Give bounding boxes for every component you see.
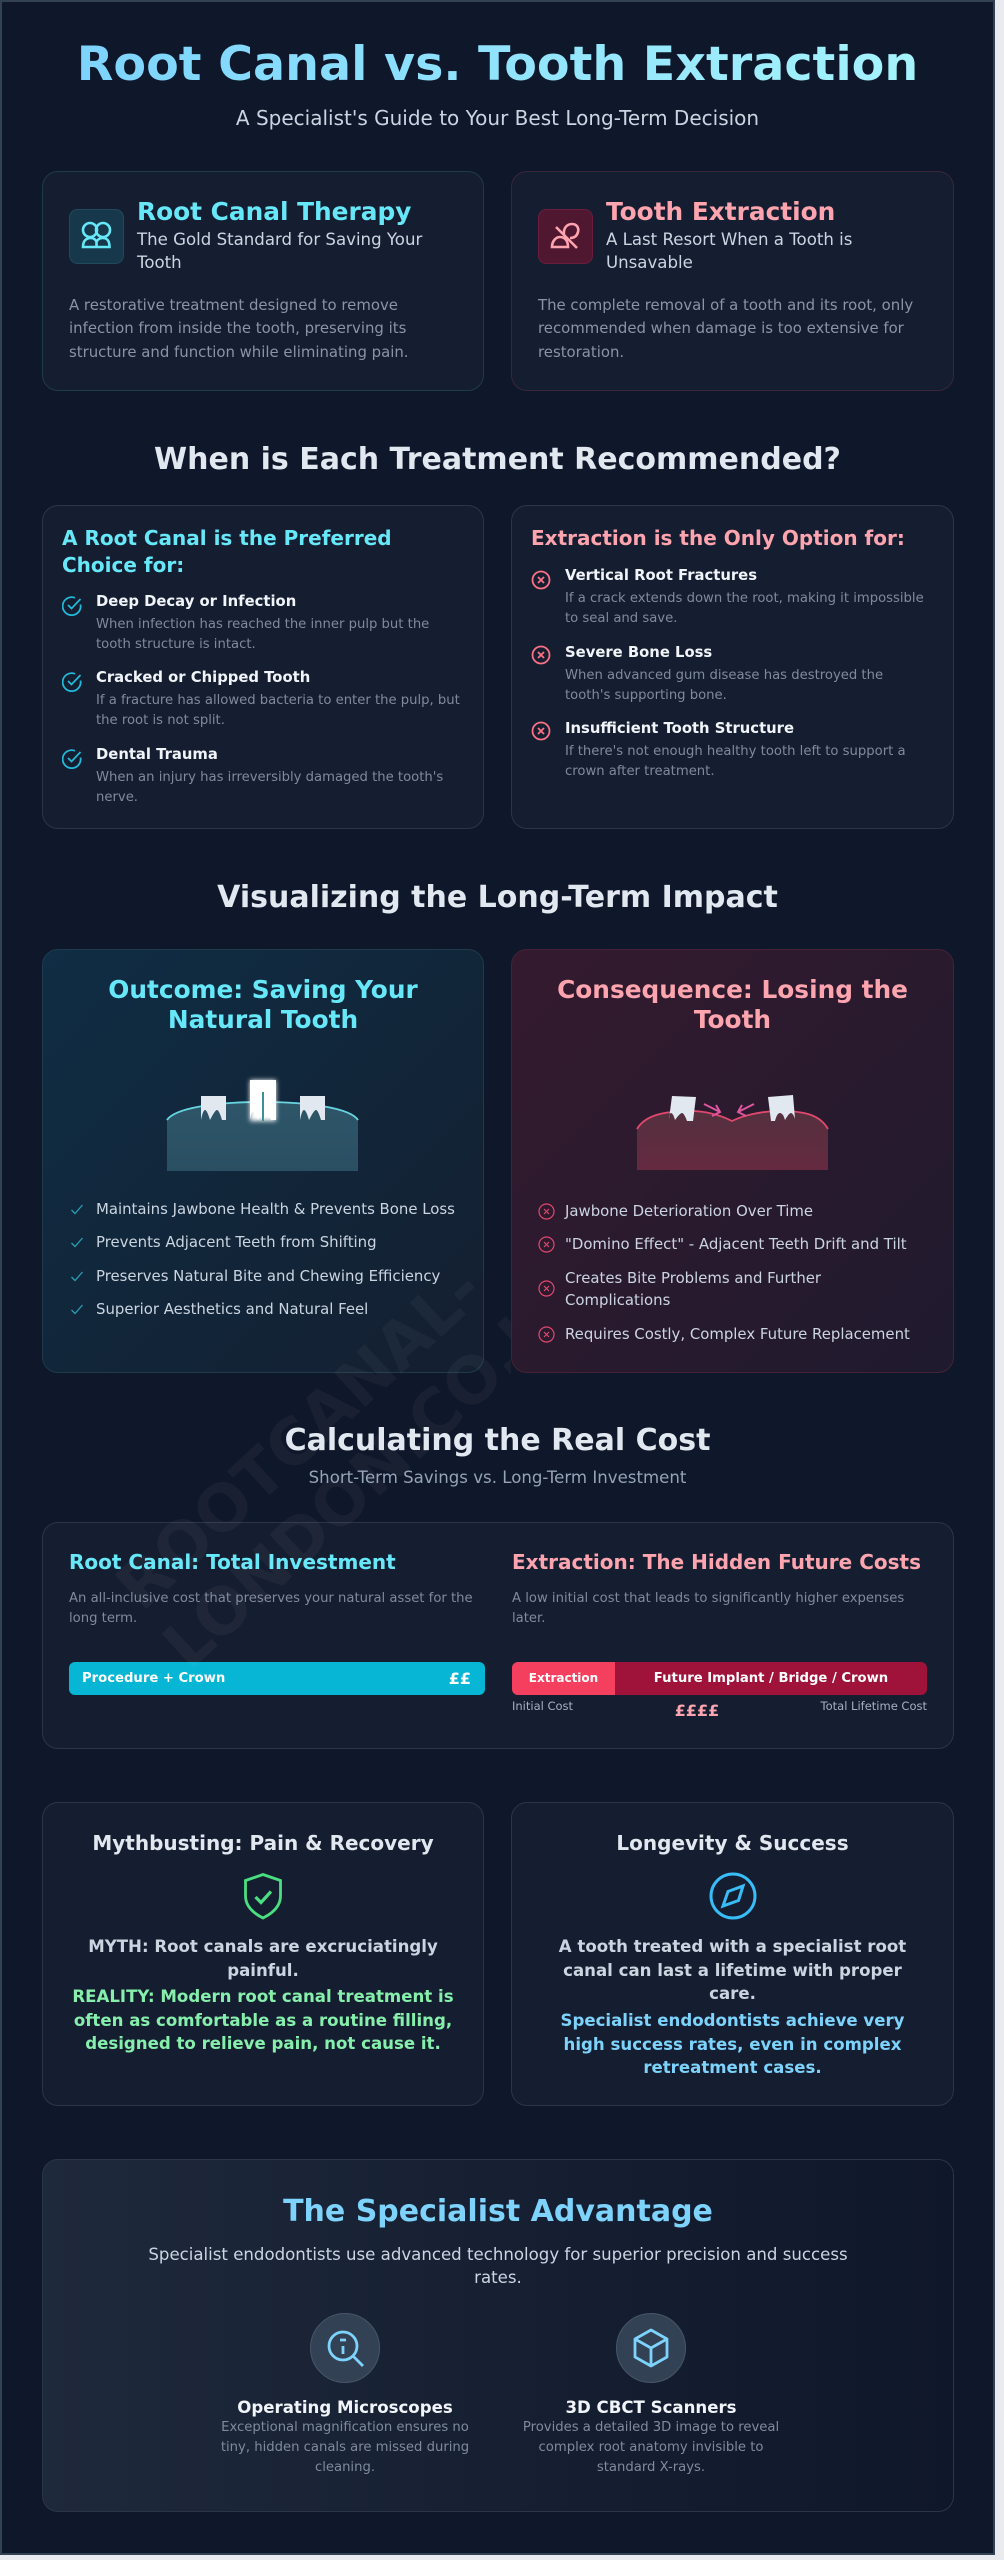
card description: The complete removal of a tooth and its root, only: [538, 296, 913, 314]
panel intro: [148, 2245, 848, 2287]
panel title: Natural Tooth: [168, 1005, 358, 1034]
icon: microscope: [310, 2313, 380, 2383]
item: cracked tooth: [62, 669, 460, 728]
longevity text: care.: [709, 1984, 756, 2003]
item: insufficient structure: Insufficient Tooth Structure: [565, 720, 794, 737]
feature description: Exceptional magnification ensures no: [221, 2420, 469, 2435]
benefit: bite: Preserves Natural Bite and Chewing Efficiency: [96, 1267, 440, 1285]
panel heading: A Root Canal is the Preferred: [62, 526, 392, 550]
item: vertical root fractures: to seal and save.: [565, 611, 677, 626]
watermark: [0, 0, 511, 2560]
item: deep decay: tooth structure is intact.: [96, 637, 256, 652]
card subtitle: Tooth: [137, 253, 182, 272]
item: dental trauma: When an injury has irreversibly damaged the tooth's: [96, 770, 443, 785]
icon: teeth: [69, 209, 124, 264]
card subtitle: [136, 230, 422, 272]
subtitle: A Specialist's Guide to Your Best Long-Term Decision: [236, 106, 759, 130]
root canal cost description: An all-inclusive cost that preserves your natural asset for the: [69, 1591, 473, 1606]
item: insufficient structure: [532, 720, 906, 779]
consequence: bite: Creates Bite Problems and Further: [565, 1269, 821, 1287]
panel heading: [62, 526, 392, 577]
consequence: domino: "Domino Effect" - Adjacent Teeth Drift and Tilt: [565, 1235, 907, 1253]
reality text: designed to relieve pain, not cause it.: [85, 2034, 441, 2053]
card subtitle: [606, 230, 852, 272]
panel title: [108, 975, 418, 1034]
consequence: replacement: Requires Costly, Complex Future Replacement: [565, 1325, 910, 1343]
subheading: real cost: Short-Term Savings vs. Long-Term Investment: [309, 1468, 686, 1487]
panel title: Mythbusting: Pain & Recovery: [92, 1831, 434, 1855]
panel intro: Specialist endodontists use advanced technology for superior precision and success: [148, 2245, 848, 2264]
panel: losing the tooth: [511, 949, 954, 1373]
illustration: healthy teeth: [166, 1076, 359, 1171]
panel: tooth extraction: [511, 171, 954, 391]
extraction cost bar: [512, 1662, 927, 1695]
panel: saving natural tooth: [42, 949, 484, 1373]
consequence: bite: [538, 1269, 821, 1309]
panel title: [557, 975, 908, 1034]
root canal cost description: [69, 1591, 473, 1626]
panel title: Outcome: Saving Your: [108, 975, 418, 1004]
extraction cost bar: Extraction: [529, 1671, 598, 1685]
myth text: painful.: [227, 1960, 299, 1980]
item: severe bone loss: tooth's supporting bone.: [565, 688, 727, 703]
card description: infection from inside the tooth, preserving its: [69, 319, 406, 337]
success text: Specialist endodontists achieve very: [560, 2011, 904, 2030]
item: vertical root fractures: If a crack extends down the root, making it impossible: [565, 591, 924, 606]
card description: structure and function while eliminating pain.: [69, 343, 409, 361]
item: dental trauma: Dental Trauma: [96, 746, 218, 763]
feature description: complex root anatomy invisible to: [539, 2440, 763, 2455]
item: severe bone loss: [532, 644, 883, 703]
icon: extraction: [538, 209, 593, 264]
root canal cost bar: Procedure + Crown: [82, 1671, 225, 1686]
longevity text: A tooth treated with a specialist root: [559, 1937, 906, 1956]
panel intro: rates.: [474, 2268, 522, 2287]
card subtitle: A Last Resort When a Tooth is: [606, 230, 852, 249]
illustration: tooth loss: [636, 1095, 829, 1170]
card description: recommended when damage is too extensive for: [538, 319, 904, 337]
longevity text: canal can last a lifetime with proper: [563, 1960, 902, 1980]
item: cracked tooth: Cracked or Chipped Tooth: [96, 669, 310, 686]
card description: [69, 296, 409, 361]
label: total lifetime cost: Total Lifetime Cost: [821, 1699, 927, 1713]
feature description: cleaning.: [315, 2460, 375, 2475]
panel: root canal therapy: [42, 171, 484, 391]
item: dental trauma: nerve.: [96, 790, 138, 805]
heading: real cost: Calculating the Real Cost: [285, 1423, 710, 1458]
root canal cost bar: [69, 1662, 485, 1695]
root canal cost description: long term.: [69, 1611, 137, 1626]
item: deep decay: When infection has reached the inner pulp but the: [96, 617, 429, 632]
extraction cost bar: Future Implant / Bridge / Crown: [654, 1671, 888, 1686]
reality text: REALITY: Modern root canal treatment is: [72, 1987, 454, 2006]
label: initial cost: Initial Cost: [512, 1699, 573, 1713]
feature title: Operating Microscopes: [237, 2398, 453, 2417]
consequence: bite: Complications: [565, 1291, 670, 1309]
panel: extraction only option: [511, 505, 954, 829]
feature description: tiny, hidden canals are missed during: [221, 2440, 469, 2455]
watermark: ROOTCANAL-: [103, 1253, 497, 1625]
item: dental trauma: [62, 746, 443, 805]
panel heading: Choice for:: [62, 553, 184, 577]
card title: Root Canal Therapy: [137, 197, 411, 226]
label: future total: ££££: [675, 1701, 719, 1720]
feature description: [221, 2420, 469, 2475]
icon: shield check: [244, 1873, 282, 1920]
item: deep decay: Deep Decay or Infection: [96, 593, 296, 610]
title: Root Canal vs. Tooth Extraction: [77, 37, 918, 92]
panel title: The Specialist Advantage: [283, 2194, 713, 2229]
item: insufficient structure: If there's not enough healthy tooth left to support a: [565, 744, 906, 759]
extraction cost description: [512, 1591, 904, 1626]
consequence: jawbone: Jawbone Deterioration Over Time: [565, 1202, 813, 1220]
feature title: 3D CBCT Scanners: [565, 2398, 737, 2417]
success text: [560, 2011, 904, 2077]
panel: mythbusting: [42, 1802, 484, 2106]
root canal cost title: Root Canal: Total Investment: [69, 1550, 396, 1574]
extraction cost title: Extraction: The Hidden Future Costs: [512, 1550, 921, 1574]
myth text: [88, 1937, 438, 1980]
card subtitle: Unsavable: [606, 253, 693, 272]
card description: [538, 296, 913, 361]
panel: specialist advantage: [42, 2159, 954, 2512]
item: insufficient structure: crown after treatment.: [565, 764, 715, 779]
card description: A restorative treatment designed to remove: [69, 296, 398, 314]
item: cracked tooth: If a fracture has allowed bacteria to enter the pulp, but: [96, 693, 460, 708]
panel title: Consequence: Losing the: [557, 975, 908, 1004]
panel heading: Extraction is the Only Option for:: [531, 526, 905, 550]
panel: cost comparison: [42, 1522, 954, 1749]
longevity text: [558, 1937, 906, 2003]
success text: retreatment cases.: [643, 2058, 822, 2077]
panel: root canal preferred: [42, 505, 484, 829]
item: severe bone loss: Severe Bone Loss: [565, 644, 712, 661]
card description: restoration.: [538, 343, 624, 361]
consequence list: [538, 1202, 910, 1343]
feature description: Provides a detailed 3D image to reveal: [523, 2420, 779, 2435]
icon: cube: [616, 2313, 686, 2383]
extraction cost description: later.: [512, 1611, 545, 1626]
reality text: [72, 1987, 454, 2053]
heading: when recommended: When is Each Treatment Recommended?: [154, 442, 841, 477]
item: severe bone loss: When advanced gum disease has destroyed the: [565, 668, 883, 683]
item: cracked tooth: the root is not split.: [96, 713, 225, 728]
heading: long-term impact: Visualizing the Long-Term Impact: [217, 880, 778, 915]
reality text: often as comfortable as a routine filling,: [74, 2010, 452, 2030]
card title: Tooth Extraction: [606, 197, 835, 226]
success text: high success rates, even in complex: [564, 2034, 901, 2054]
benefit: aesthetics: Superior Aesthetics and Natural Feel: [96, 1300, 368, 1318]
item: deep decay: [62, 593, 429, 652]
benefit: adjacent teeth: Prevents Adjacent Teeth from Shifting: [96, 1233, 377, 1251]
extraction cost description: A low initial cost that leads to significantly higher expenses: [512, 1591, 904, 1606]
panel: longevity: [511, 1802, 954, 2106]
feature description: [516, 2418, 786, 2478]
panel title: Tooth: [694, 1005, 771, 1034]
root canal cost bar: ££: [449, 1669, 471, 1688]
benefit: jawbone: Maintains Jawbone Health & Prevents Bone Loss: [96, 1200, 455, 1218]
item: vertical root fractures: [532, 567, 924, 626]
feature description: standard X-rays.: [597, 2460, 705, 2475]
item: vertical root fractures: Vertical Root Fractures: [565, 567, 757, 584]
card subtitle: The Gold Standard for Saving Your: [137, 230, 422, 249]
myth text: MYTH: Root canals are excruciatingly: [88, 1937, 438, 1956]
icon: compass: [710, 1872, 756, 1920]
panel title: Longevity & Success: [616, 1831, 849, 1855]
benefit list: [71, 1200, 455, 1318]
